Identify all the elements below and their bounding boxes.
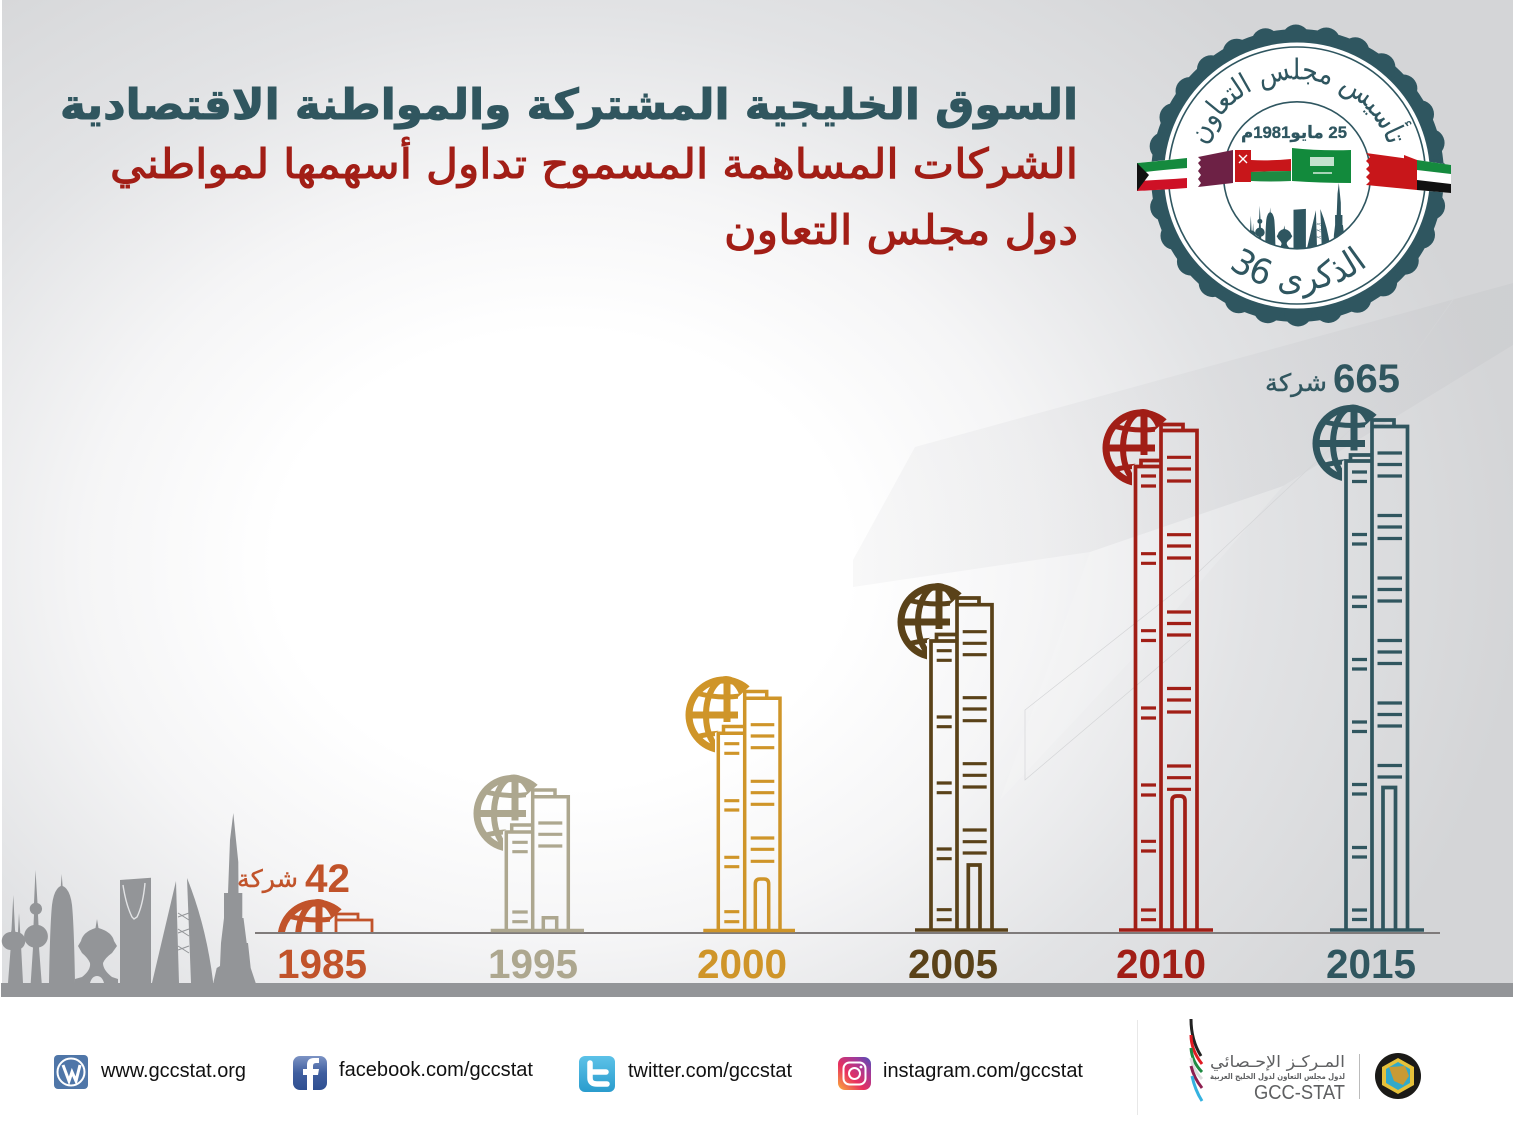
subtitle xyxy=(110,137,1078,254)
badge arc text bottom: الذكرى 36 xyxy=(1231,246,1366,299)
link: twitter: twitter.com/gccstat xyxy=(628,1060,792,1082)
bar: 2000 xyxy=(688,679,795,930)
bar: 1985 xyxy=(278,899,374,932)
value: 665 companies: 665 xyxy=(1333,357,1400,401)
badge date: 25 مايو1981م xyxy=(1241,123,1347,143)
flag: Kuwait xyxy=(1137,158,1187,191)
link: website: www.gccstat.org xyxy=(100,1060,246,1082)
flag: Saudi Arabia xyxy=(1292,148,1351,183)
bar: 2005 xyxy=(900,586,1008,930)
value: 665 companies xyxy=(1265,357,1400,401)
badge arc text top: تأسيس مجلس التعاون xyxy=(1196,58,1412,144)
footer logo divider xyxy=(1137,1020,1138,1115)
skyline silhouette xyxy=(2,813,256,983)
year: 1995: 1995 xyxy=(488,941,578,987)
logo: organisation name: GCC-STAT xyxy=(1254,1082,1345,1104)
link: instagram: instagram.com/gccstat xyxy=(883,1060,1083,1082)
flag: Oman xyxy=(1235,150,1291,182)
icon: wordpress xyxy=(54,1055,88,1089)
logo: organisation name: لدول مجلس التعاون لدول الخليج العربية xyxy=(1210,1072,1345,1082)
icon: facebook xyxy=(293,1056,327,1090)
link: facebook: facebook.com/gccstat xyxy=(339,1059,533,1081)
flag: UAE xyxy=(1404,155,1451,193)
value: 42 companies: 42 xyxy=(305,857,350,901)
flag: Bahrain xyxy=(1366,153,1417,190)
badge: 36th anniversary seal xyxy=(1137,24,1451,326)
subtitle: الشركات المساهمة المسموح تداول أسهمها لمواطني xyxy=(110,137,1078,189)
year: 2010: 2010 xyxy=(1116,941,1206,987)
logo: organisation name xyxy=(1210,1052,1345,1104)
value: 665 companies: شركة xyxy=(1265,369,1327,397)
bar: 2010 xyxy=(1105,412,1213,930)
year: 2000: 2000 xyxy=(697,941,787,987)
background swoosh xyxy=(853,215,1513,800)
flag: Qatar xyxy=(1198,150,1233,187)
logo: GCC-STAT ribbon xyxy=(1191,1019,1202,1101)
year: 1985: 1985 xyxy=(277,941,367,987)
logo: GCC emblem xyxy=(1375,1053,1421,1099)
value: 42 companies xyxy=(237,857,350,901)
year: 2005: 2005 xyxy=(908,941,998,987)
icon: instagram xyxy=(838,1057,871,1090)
subtitle: دول مجلس التعاون xyxy=(724,206,1078,254)
logo: organisation name: المـركـز الإحـصائي xyxy=(1210,1052,1345,1072)
title: السوق الخليجية المشتركة والمواطنة الاقتصادية xyxy=(60,80,1078,130)
bar: 2015 xyxy=(1315,408,1424,930)
badge skyline xyxy=(1250,183,1344,248)
year: 2015: 2015 xyxy=(1326,941,1416,987)
value: 42 companies: شركة xyxy=(237,865,298,893)
chart baseline xyxy=(255,932,1440,934)
icon: twitter xyxy=(579,1056,615,1092)
bar: 1995 xyxy=(476,778,584,930)
bottom band xyxy=(1,983,1513,997)
logo separator xyxy=(1359,1054,1360,1099)
